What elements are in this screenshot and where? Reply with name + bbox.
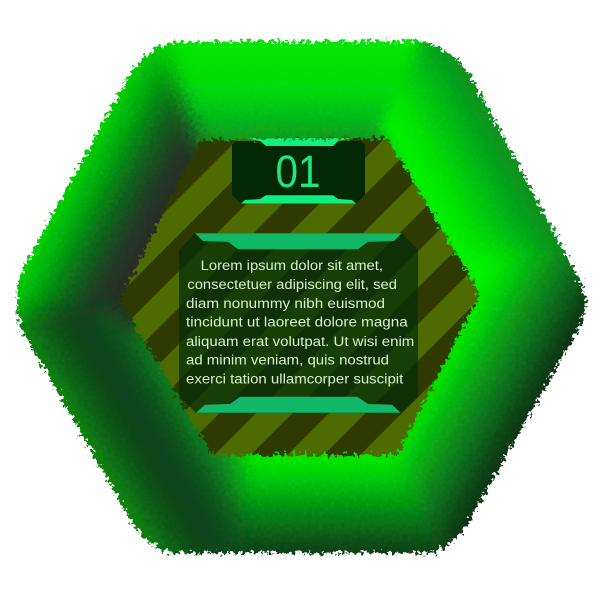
body text: diam nonummy nibh euismod [186, 296, 385, 312]
body text: ad minim veniam, quis nostrud [186, 353, 389, 369]
body text: exerci tation ullamcorper suscipit [186, 372, 403, 388]
body text: aliquam erat volutpat. Ut wisi enim [186, 334, 414, 350]
fur band: lower right [392, 242, 588, 556]
card bottom bar [196, 397, 401, 413]
fur band: upper left [14, 39, 220, 346]
body text: Lorem ipsum dolor sit amet, [201, 258, 383, 274]
body text: consectetuer adipiscing elit, sed [187, 277, 397, 293]
panel: number badge [232, 138, 365, 204]
body text [186, 258, 414, 388]
fur band: bottom [162, 424, 456, 556]
badge plate [232, 141, 365, 204]
badge bottom bar [241, 195, 356, 204]
number 01: 01 [276, 146, 320, 197]
panel: text card [179, 233, 418, 413]
fur band: top [152, 37, 458, 162]
fur band: lower left [16, 295, 257, 556]
card body [179, 233, 418, 413]
body text: tincidunt ut laoreet dolore magna [186, 315, 408, 331]
striped hazard background inside hexagon [110, 130, 490, 465]
fur band: upper right [372, 38, 588, 346]
card top bar [195, 233, 402, 249]
badge top bar [245, 138, 353, 146]
